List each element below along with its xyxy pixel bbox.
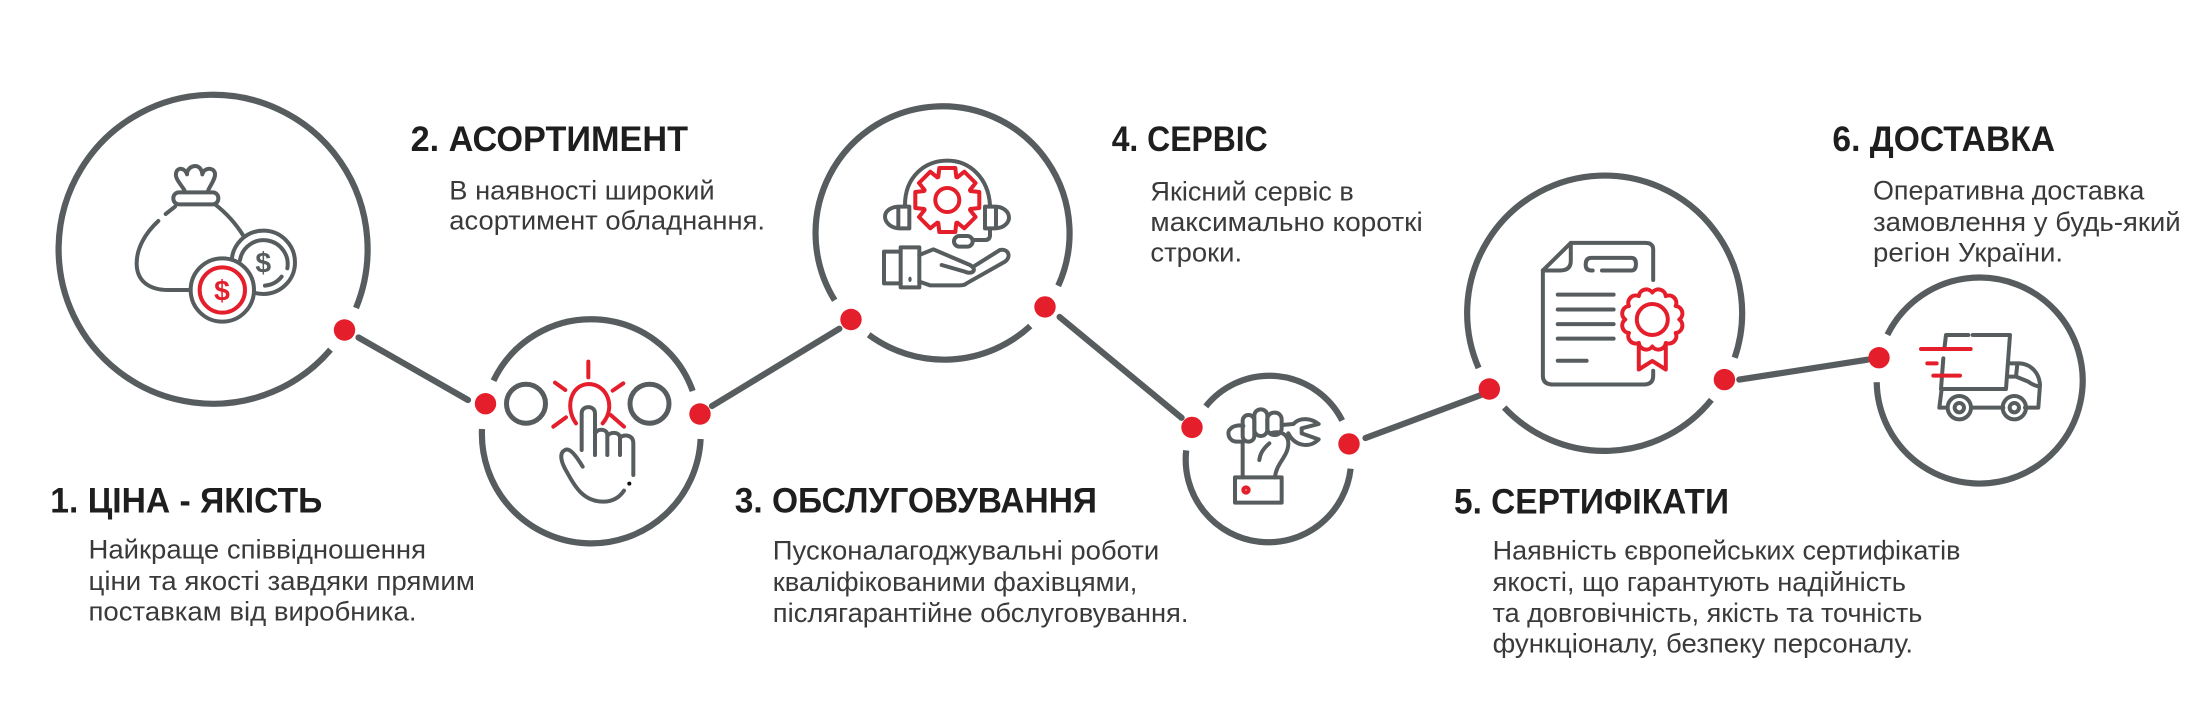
- ring 1: [59, 95, 368, 404]
- body 5: Наявність європейських сертифікатів: [1493, 535, 1960, 565]
- body 3: кваліфікованими фахівцями,: [773, 567, 1137, 597]
- body 3: післягарантійне обслуговування.: [773, 598, 1188, 628]
- icon: delivery truck: [1921, 335, 2040, 419]
- text block: step 4: [1112, 120, 1423, 268]
- dots 4: [1181, 417, 1360, 455]
- option rings: [506, 384, 669, 423]
- ring 5: [1467, 176, 1742, 451]
- body 4: строки.: [1150, 238, 1242, 268]
- body 5: функціоналу, безпеку персоналу.: [1493, 628, 1913, 658]
- icon: red gear: [915, 168, 979, 232]
- text block: step 3: [735, 482, 1188, 628]
- body 1: Найкраще співвідношення: [88, 535, 426, 565]
- dot 1: [334, 319, 355, 341]
- body 6: регіон України.: [1873, 238, 2063, 268]
- dots 5: [1479, 369, 1735, 400]
- panel: step 4 circle with wrench fist: [1181, 376, 1360, 542]
- text block: step 2: [411, 120, 765, 236]
- ring 4: [1186, 376, 1351, 542]
- body 1: ціни та якості завдяки прямим: [88, 566, 475, 596]
- icon: headset and open hand: [884, 161, 1009, 287]
- connector: step 5 to 6: [1739, 360, 1867, 380]
- body 3: Пусконалагоджувальні роботи: [773, 535, 1159, 565]
- connector: step 3 to 4: [1060, 317, 1182, 418]
- heading 6: 6. ДОСТАВКА: [1832, 120, 2055, 159]
- body 4: [1150, 176, 1423, 268]
- body 2: [449, 176, 765, 236]
- heading 2: 2. АСОРТИМЕНТ: [411, 120, 688, 159]
- icon: fist holding wrench: [1228, 409, 1319, 503]
- ring 3: [816, 106, 1070, 360]
- body 3: [773, 535, 1188, 628]
- connector: step 2 to 3: [712, 329, 839, 406]
- dot 6: [1868, 347, 1890, 368]
- body 1: [88, 535, 475, 627]
- heading 3: 3. ОБСЛУГОВУВАННЯ: [735, 482, 1097, 521]
- icon: money bag and coins: $: [255, 247, 271, 279]
- icon: document: [1543, 243, 1653, 385]
- icon: money bag and coins: $: [214, 275, 230, 307]
- body 4: Якісний сервіс в: [1150, 176, 1354, 206]
- panel: step 5 circle with certificate: [1467, 176, 1742, 451]
- body 4: максимально короткі: [1150, 207, 1423, 237]
- ring 2: [482, 319, 701, 543]
- body 5: та довговічність, якість та точність: [1493, 598, 1922, 628]
- panel: step 1 circle with money bag: [59, 95, 368, 404]
- icon: money bag and coins: [137, 166, 295, 322]
- body 6: замовлення у будь-який: [1873, 207, 2181, 237]
- text block: step 6: [1832, 120, 2181, 268]
- body 6: [1873, 176, 2181, 268]
- body 5: [1493, 535, 1960, 658]
- dots 3: [840, 296, 1056, 330]
- heading 4: 4. СЕРВІС: [1112, 120, 1268, 159]
- icon: finger pressing button: [553, 362, 633, 502]
- connector: step 1 to 2: [358, 338, 468, 400]
- dots 2: [475, 393, 711, 425]
- text block: step 1: [50, 482, 475, 627]
- body 1: поставкам від виробника.: [88, 597, 416, 627]
- body 6: Оперативна доставка: [1873, 176, 2145, 206]
- body 2: В наявності широкий: [449, 176, 715, 206]
- text block: step 5: [1454, 482, 1960, 658]
- panel: step 6 circle with truck: [1868, 278, 2083, 484]
- icon: red rosette seal: [1622, 289, 1682, 370]
- panel: step 3 circle with support icon: [816, 106, 1070, 360]
- heading 5: 5. СЕРТИФІКАТИ: [1454, 482, 1729, 522]
- heading 1: 1. ЦІНА - ЯКІСТЬ: [50, 482, 322, 521]
- panel: step 2 circle with pointing hand: [475, 319, 711, 543]
- ring 6: [1877, 278, 2083, 484]
- body 2: асортимент обладнання.: [449, 206, 765, 236]
- body 5: якості, що гарантують надійність: [1493, 567, 1906, 597]
- connector: step 4 to 5: [1366, 395, 1481, 438]
